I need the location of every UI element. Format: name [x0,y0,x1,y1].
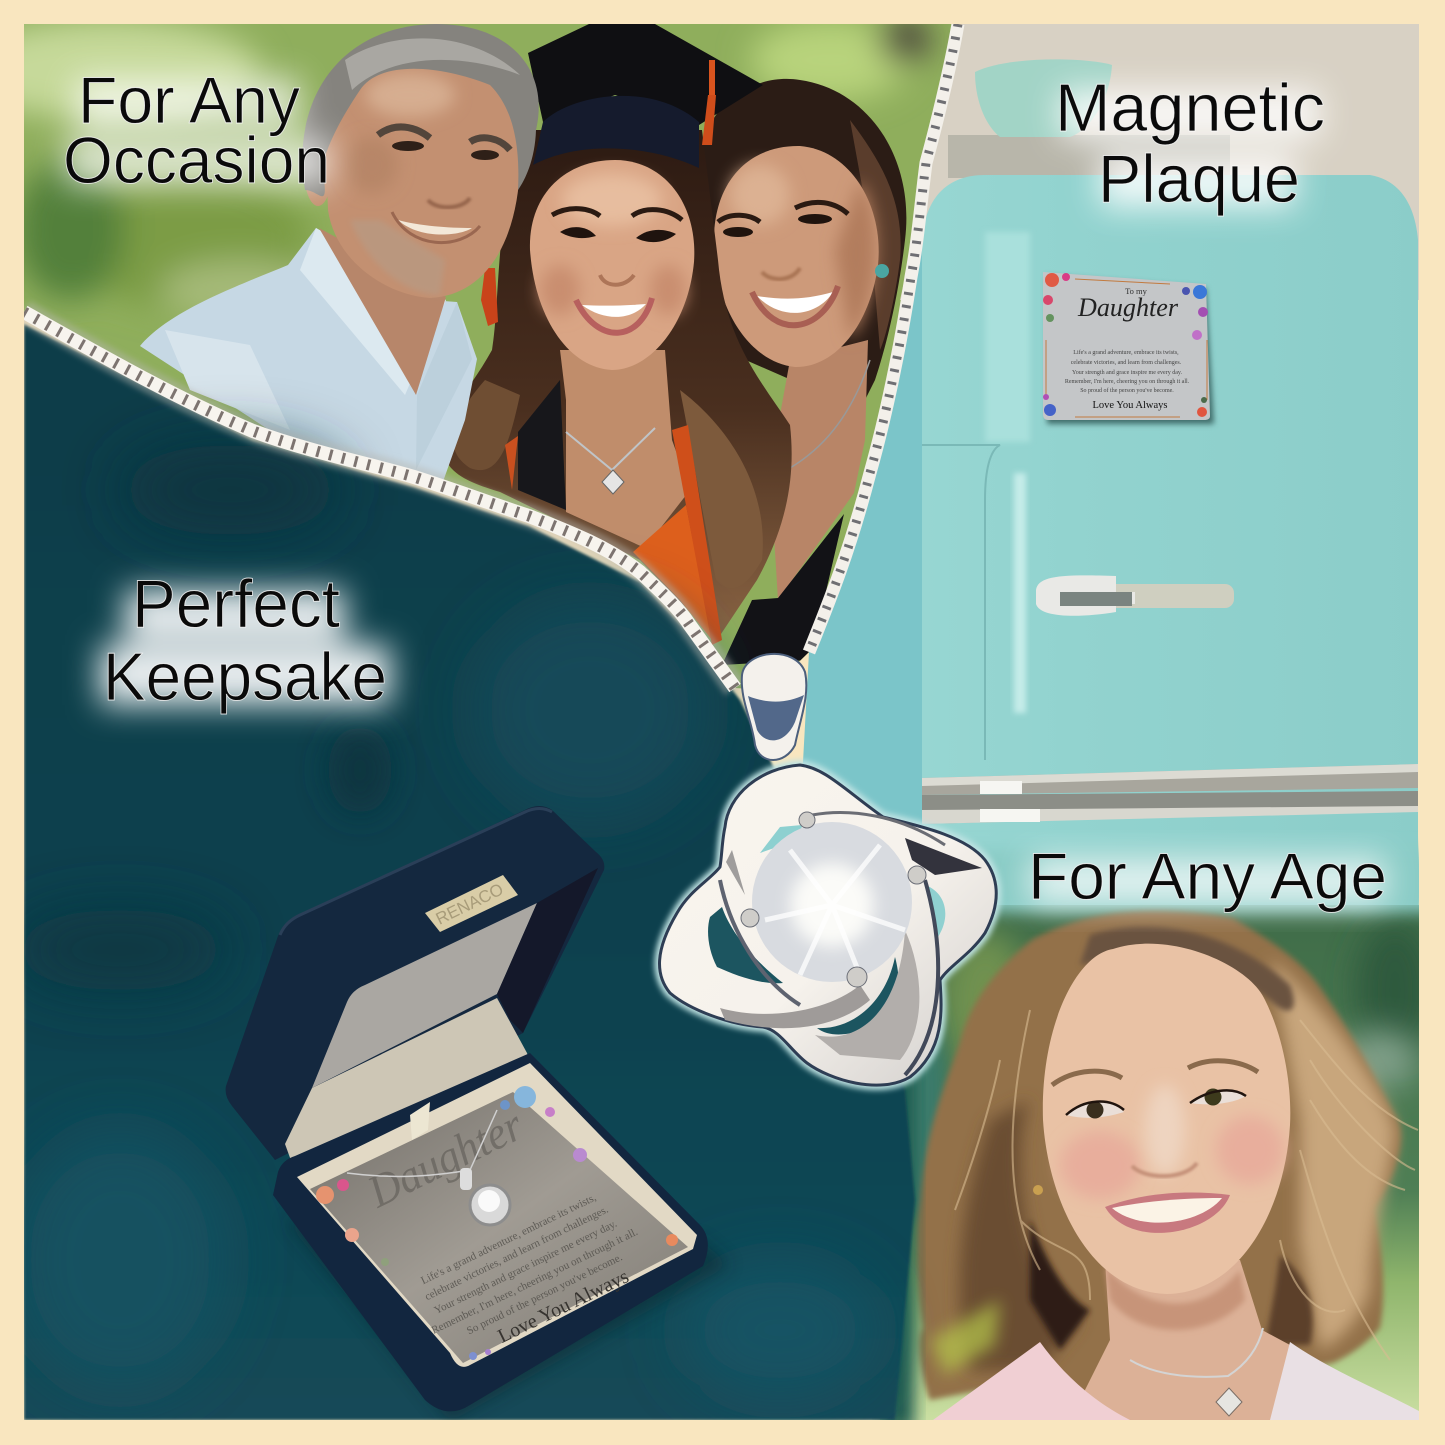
panel: child photo [870,850,1440,1430]
necklace chain [24,24,958,688]
engraved card [310,1086,688,1363]
heading: For Any Age: For Any Age [1028,839,1387,913]
gold nameplate: RENACO [433,880,506,929]
lid interior [312,903,537,1088]
knot body [660,765,996,1085]
large pendant [660,654,996,1085]
box lid [226,806,604,1160]
eyes [1066,1102,1124,1118]
plaque heading: Daughter [1077,293,1179,322]
heading: Perfect Keepsake: Keepsake [103,639,387,715]
door seam [922,445,1000,760]
heading: Magnetic Plaque: Plaque [1098,141,1300,217]
plaque heading: To my [1125,286,1148,296]
small necklace [1130,1328,1263,1377]
card heading: Daughter [359,1099,531,1218]
velvet folds [10,445,880,1400]
card message: celebrate victories, and learn from challenges. [423,1203,611,1303]
card sign-off: Love You Always [494,1265,633,1348]
graduation cap [528,24,763,125]
plaque message: Remember, I'm here, cheering you on through it all. [1065,379,1190,385]
stone facets [765,845,905,975]
card flowers [316,1086,678,1360]
fridge side [803,250,922,826]
small necklace [347,1110,510,1225]
gold nameplate [425,875,518,932]
glow: magnetic plaque [1060,90,1320,207]
yellow bokeh through hair [930,1300,1000,1375]
fridge handle [1036,575,1234,616]
lid rim highlight [280,808,552,935]
heading: Perfect Keepsake [103,566,387,715]
pendant shading [720,813,982,1075]
card message: Your strength and grace inspire me every day. [432,1218,619,1317]
kitchen wall [900,24,1419,300]
graduate [441,24,792,645]
cushion fold [285,998,530,1177]
left edge fade into velvet [884,1050,914,1430]
face [1043,944,1290,1294]
heading: For Any Occasion: Occasion [63,123,330,197]
plaque flowers [1043,273,1208,417]
door highlight strip [985,232,1030,442]
father [140,24,539,490]
plaque message: Life's a grand adventure, embrace its twists, [1073,349,1179,356]
pendant holes [708,825,945,1034]
heading: Magnetic Plaque: Magnetic [1055,70,1325,146]
graduate face [530,160,694,370]
hair mass [917,911,1401,1400]
graduate chest [560,350,690,548]
box shadow [285,1220,730,1422]
shelf [948,135,1230,178]
base interior [297,1063,697,1367]
glow: for any occasion [65,78,330,186]
panel: family graduation photo [24,24,952,688]
plaque sign-off: Love You Always [1093,400,1167,411]
heading: Perfect Keepsake: Perfect [132,566,340,642]
plaque message: celebrate victories, and learn from challenges. [1071,359,1182,366]
graduate hair [441,130,792,640]
plaque message [1065,349,1190,394]
heading: For Any Occasion [63,63,330,197]
teal bowl [975,59,1112,137]
mother [700,79,906,665]
father ear [306,170,328,206]
dark hair shadows [1265,1255,1313,1345]
loose hair strands [955,1010,1418,1360]
girl [917,911,1419,1420]
large round stone [752,822,912,982]
bail [742,654,806,760]
stone highlight [790,863,874,947]
glow: perfect keepsake [100,590,390,705]
father face [325,62,520,298]
fridge body [922,175,1418,905]
plaque message: So proud of the person you've become. [1080,387,1174,394]
plaque message: Your strength and grace inspire me every day. [1072,370,1182,376]
chrome trim bars [922,764,1418,824]
panel: teal velvet [10,324,915,1420]
glow: for any age [1030,858,1385,904]
pendant glow [660,765,996,1085]
box base [273,1053,708,1411]
panel: refrigerator with plaque [803,24,1419,905]
smile [1105,1193,1230,1233]
card message: Life's a grand adventure, embrace its twists, [419,1191,598,1287]
graduate gown [518,380,566,510]
ribbon tab [410,1102,430,1140]
card message: Remember, I'm here, cheering you on through it all. [430,1226,640,1337]
photo background [880,900,1435,1430]
father hair [302,24,539,196]
prongs [741,812,926,987]
card message: So proud of the person you've become. [465,1251,625,1337]
hair highlights at top [1080,927,1294,1011]
lighter right hair [1270,960,1395,1350]
neck and chest [1084,1260,1290,1420]
heading: For Any Occasion: For Any [78,63,300,137]
garden background [24,24,952,688]
shirt [933,1342,1130,1420]
magnetic plaque [1043,272,1214,424]
jewelry box [226,806,730,1422]
teal blend at top of photo [870,850,1440,912]
heading: Magnetic Plaque [1055,70,1325,217]
